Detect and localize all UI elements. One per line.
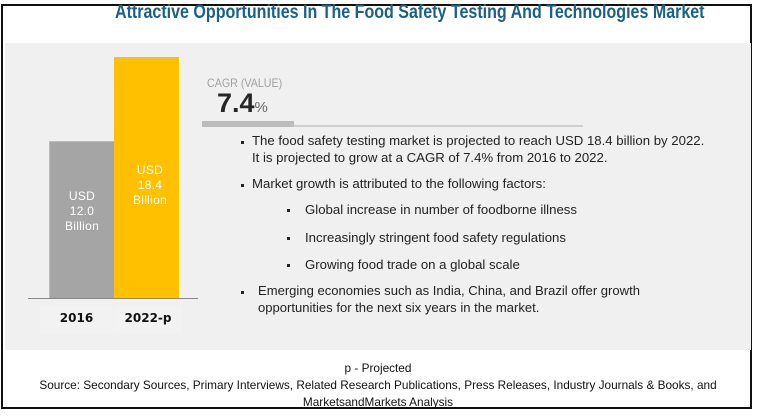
CAGR label: CAGR (VALUE) [207,76,282,90]
bar label: 2022 value: USD [137,163,163,177]
sub-bullet: regulations: Increasingly stringent food safety regulations [305,230,566,245]
CAGR thick rule [202,121,294,127]
bar: 2022-p [114,57,179,298]
bullet text block [241,133,704,315]
bar label: 2016 value: 12.0 [70,204,94,218]
sub-bullet: food trade: Growing food trade on a global scale [305,257,520,272]
category label: 2016 [40,305,113,333]
sub-bullet: foodborne illness: Global increase in number of foodborne illness [305,202,577,217]
bar label: 2016 value: Billion [65,219,99,233]
bullet: emerging economies: opportunities for the next six years in the market. [258,300,539,315]
CAGR thin rule [202,125,583,127]
footnote: projected: p - Projected [345,361,411,375]
category label: 2022-p: 2022-p [125,311,171,325]
bar label: 2016 value: USD [69,189,95,203]
bullet: market projection [241,133,704,165]
bar: 2016 [49,141,114,298]
bar label: 2022 value: Billion [133,193,167,207]
bar label: 2022 value [133,163,167,207]
category label: 2022-p [114,305,182,333]
footnote and source [39,361,717,409]
CAGR callout [202,76,583,127]
source text: MarketsandMarkets Analysis [303,395,453,409]
bullet: market projection: It is projected to grow at a CAGR of 7.4% from 2016 to 2022. [252,150,608,165]
axis line [28,298,198,299]
bar chart [28,57,198,325]
bar label: 2022 value: 18.4 [138,178,162,192]
bullet: emerging economies: Emerging economies such as India, China, and Brazil offer growth [258,283,640,298]
category label: 2016: 2016 [60,311,93,325]
bullet: growth factors: Market growth is attributed to the following factors: [252,176,546,191]
source text: Source: Secondary Sources, Primary Interviews, Related Research Publications, Press Releases, Industry Journals & Books, and [39,378,717,392]
bullet: market projection: The food safety testing market is projected to reach USD 18.4 billion by 2022. [252,133,704,148]
bar label: 2016 value [65,189,99,233]
source text [39,378,717,409]
CAGR value: 7.4% [217,88,268,118]
bullet: emerging economies [241,283,640,315]
panel: main content [5,43,751,350]
title: Attractive Opportunities In The Food Safety Testing And Technologies Market [115,2,705,23]
